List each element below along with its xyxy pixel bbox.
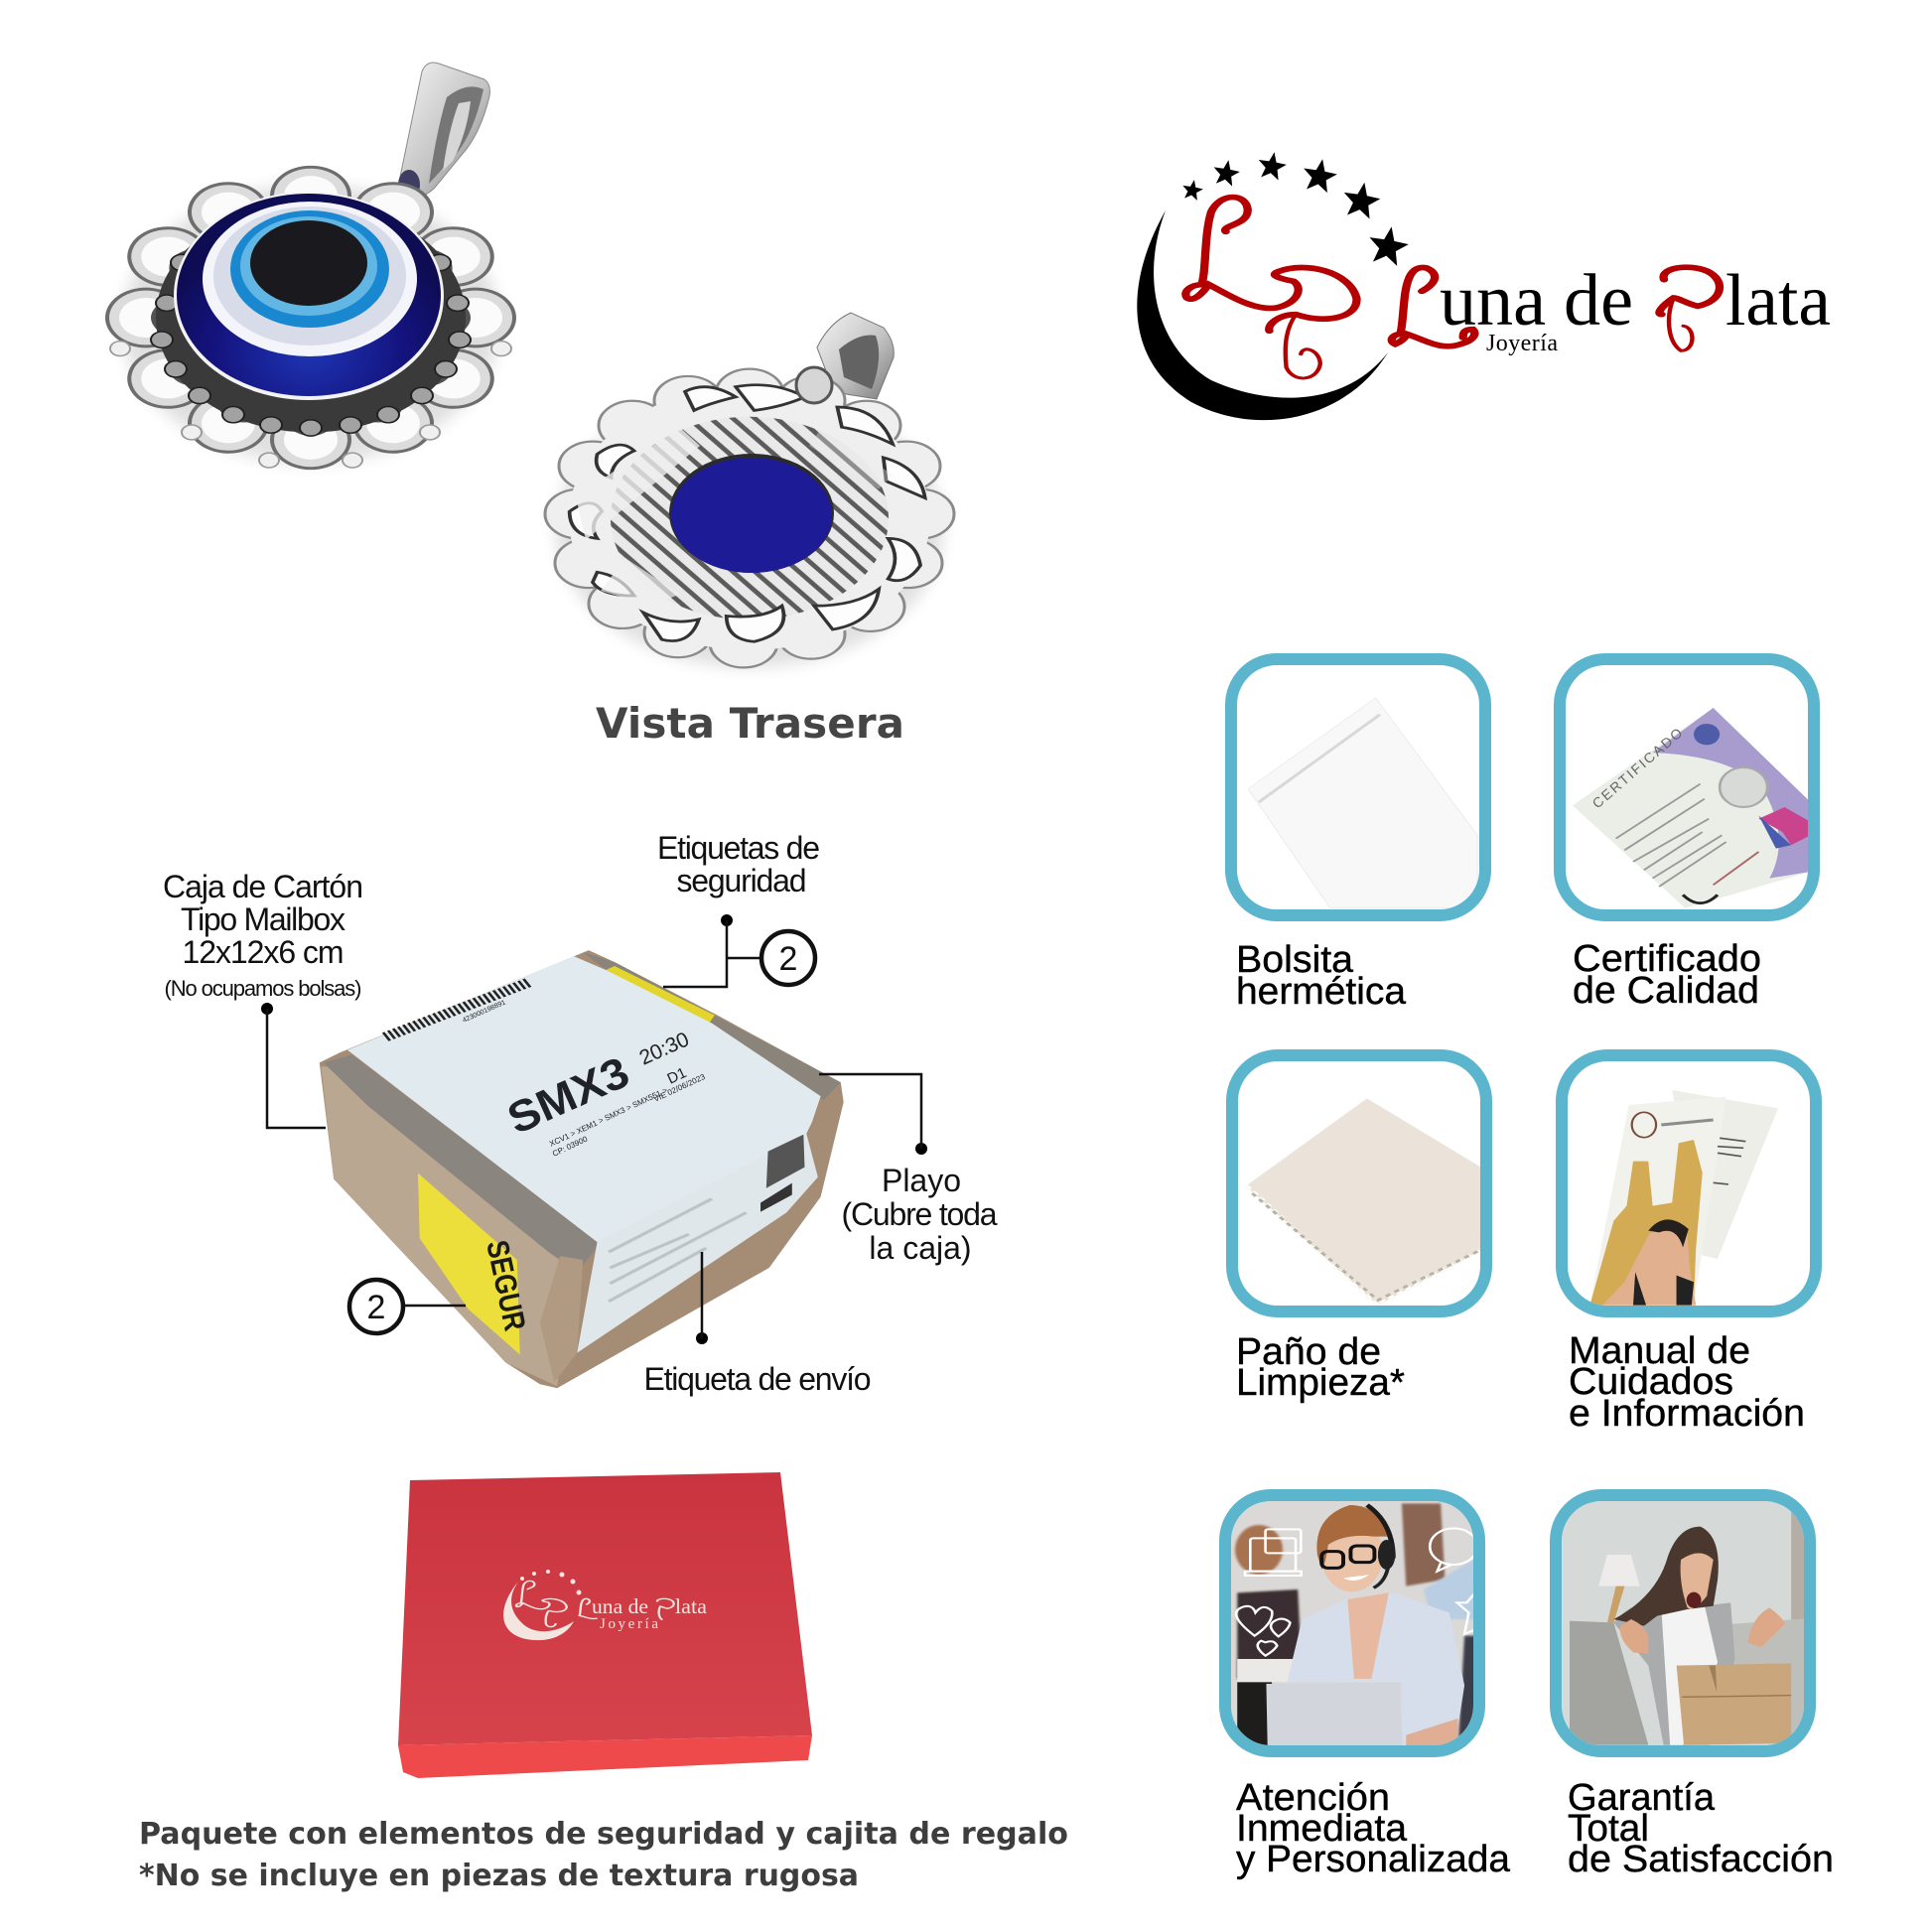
caption: Vista Trasera: Vista Trasera: [596, 699, 904, 748]
label: hermética: [1236, 971, 1407, 1013]
foil logo: Joyería: [600, 1616, 658, 1632]
stars: [1180, 150, 1411, 267]
barcode: [385, 982, 530, 1037]
label: [1569, 1330, 1805, 1435]
photo: certificate: [1573, 708, 1811, 908]
photo: cleaning cloth: [1246, 1098, 1490, 1306]
callout text: Caja de Cartón: [163, 869, 363, 904]
label: Total: [1568, 1808, 1649, 1850]
leader line with count badge: 2: [779, 940, 797, 978]
red LP monogram and initials: [1185, 198, 1720, 378]
label: [1236, 939, 1407, 1013]
wordmark: [1440, 260, 1831, 356]
red gift box: [398, 1472, 812, 1778]
label: e Información: [1569, 1393, 1805, 1435]
panel: atencion inmediata: [1224, 1493, 1511, 1880]
box silhouette: [320, 950, 844, 1388]
label: de Satisfacción: [1568, 1839, 1834, 1880]
plastic shadow strip: [324, 1054, 600, 1272]
box lid: [398, 1472, 812, 1745]
pendant bail: [398, 63, 489, 200]
callout text: la caja): [869, 1230, 972, 1266]
callout text: Etiquetas de: [657, 830, 820, 866]
yellow sticker top: [606, 966, 715, 1024]
footer note: [139, 1817, 1068, 1893]
wordmark: Joyería: [1486, 331, 1558, 356]
box label texts: SMX3: [500, 1047, 636, 1144]
photo: brochures: [1589, 1090, 1778, 1306]
callout text: Etiqueta de envío: [643, 1361, 872, 1397]
filigree scalloped border: [105, 166, 516, 470]
foil logo: lata: [675, 1594, 708, 1618]
photo: support agent: [1231, 1501, 1473, 1745]
callout text: seguridad: [677, 863, 806, 898]
leader line with count badge: [663, 914, 815, 987]
callout text: Playo: [882, 1163, 961, 1198]
callout: caja de carton: [163, 869, 363, 1128]
label: Garantía: [1568, 1777, 1716, 1819]
callout text: [163, 869, 363, 1001]
back plate: [545, 369, 954, 667]
exclusion note: *No se incluye en piezas de textura rugosa: [139, 1859, 859, 1893]
panel: garantia total: [1556, 1493, 1834, 1880]
box label texts: SEGUR: [480, 1237, 533, 1333]
callout: second security label badge: 2: [367, 1289, 385, 1326]
callout: playo: [819, 1074, 998, 1266]
callout: second security label badge: [349, 1280, 466, 1333]
callout text: [657, 830, 820, 898]
leader line: [696, 1252, 708, 1344]
label: [1573, 938, 1761, 1012]
box label texts: [462, 999, 707, 1333]
foil logo: una de: [592, 1594, 648, 1618]
back bail: [817, 313, 894, 399]
callout: etiqueta de envio: [643, 1252, 872, 1397]
blurred address lines: [609, 1198, 747, 1302]
pendant back view: [545, 313, 954, 667]
label: [1236, 1777, 1511, 1880]
leader line: [819, 1074, 927, 1155]
label: [1236, 1331, 1405, 1404]
label: Manual de: [1569, 1330, 1750, 1372]
label: Paño de: [1236, 1331, 1381, 1373]
panel: manual de cuidados: [1562, 1055, 1816, 1435]
callout text: (No ocupamos bolsas): [165, 976, 361, 1001]
panel: pano de limpieza: [1232, 1055, 1490, 1404]
photo: happy customer: [1562, 1501, 1804, 1745]
evil eye glass: [174, 192, 444, 400]
label: Atención: [1236, 1777, 1390, 1819]
box label texts: 423000198891: [462, 999, 507, 1025]
callout text: [842, 1163, 998, 1266]
label: y Personalizada: [1236, 1839, 1511, 1880]
blue cabochon: [669, 454, 834, 573]
label: Cuidados: [1569, 1361, 1733, 1403]
leader line: [261, 1003, 326, 1128]
box label texts: 20:30: [636, 1028, 693, 1070]
wordmark: una: [1440, 260, 1546, 342]
label: Certificado: [1573, 938, 1761, 980]
white shipping label: [347, 956, 821, 1352]
panel: bolsita hermetica: [1231, 659, 1485, 1013]
pendant front view: [105, 63, 516, 470]
box front flap: [398, 1735, 812, 1778]
package description: Paquete con elementos de seguridad y cajita de regalo: [139, 1817, 1068, 1852]
callout text: (Cubre toda: [842, 1196, 998, 1232]
wordmark: de: [1564, 260, 1633, 342]
QR code: [766, 1135, 804, 1188]
callout: etiquetas de seguridad: [657, 830, 820, 987]
label: Inmediata: [1236, 1808, 1408, 1850]
callout text: 12x12x6 cm: [183, 934, 344, 970]
label: [1568, 1777, 1834, 1880]
wordmark: lata: [1725, 260, 1831, 342]
box label texts: XCV1 > XEM1 > SMX3 > SMX551 >: [548, 1086, 669, 1149]
foil logo: [503, 1570, 708, 1640]
callout text: Tipo Mailbox: [181, 901, 345, 937]
label: Bolsita: [1236, 939, 1354, 981]
logo: Luna de Plata: [1137, 150, 1831, 420]
crescent moon: [1137, 210, 1388, 420]
box label texts: D1: [665, 1064, 689, 1088]
label: de Calidad: [1573, 970, 1759, 1012]
photo: certificate: CERTIFICADO: [1588, 724, 1687, 811]
photo: plastic bag: [1248, 698, 1477, 908]
label: Limpieza*: [1236, 1362, 1405, 1404]
box label texts: CP: 03900: [551, 1134, 590, 1159]
panel: certificado de calidad: [1560, 659, 1814, 1012]
left cardboard face: [321, 1066, 575, 1386]
shipping box illustration: [320, 950, 844, 1388]
box label texts: VIE 02/06/2023: [652, 1072, 707, 1104]
yellow sticker left: [418, 1173, 520, 1354]
